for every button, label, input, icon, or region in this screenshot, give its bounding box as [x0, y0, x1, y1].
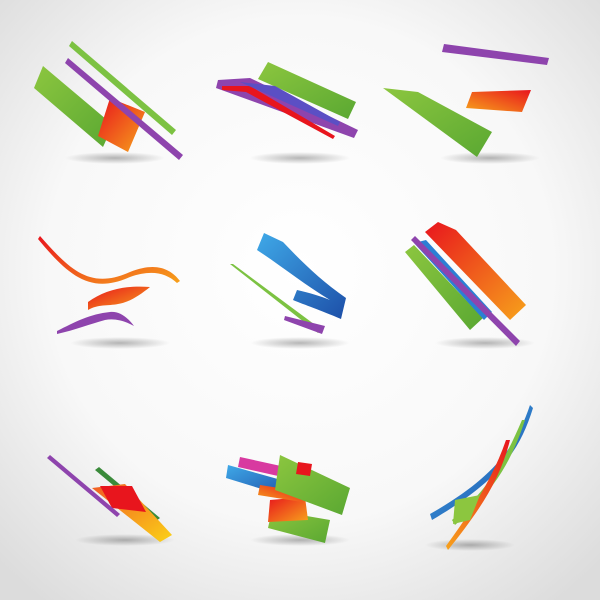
- icon 5: blue curved ribbon: [230, 233, 350, 349]
- icon 8: stacked rectangles: [226, 455, 350, 546]
- icon 2: flat layered strips: [216, 62, 358, 164]
- icon 6: stacked diagonal bands: [405, 222, 535, 349]
- icon 7: slanted strips: [47, 455, 175, 546]
- icon 4: wavy ribbons: [38, 236, 180, 349]
- icon 3: floating strips: [383, 44, 549, 164]
- icon 9: rising ribbons: [425, 405, 533, 551]
- icon 1: diagonal bars: [34, 41, 183, 164]
